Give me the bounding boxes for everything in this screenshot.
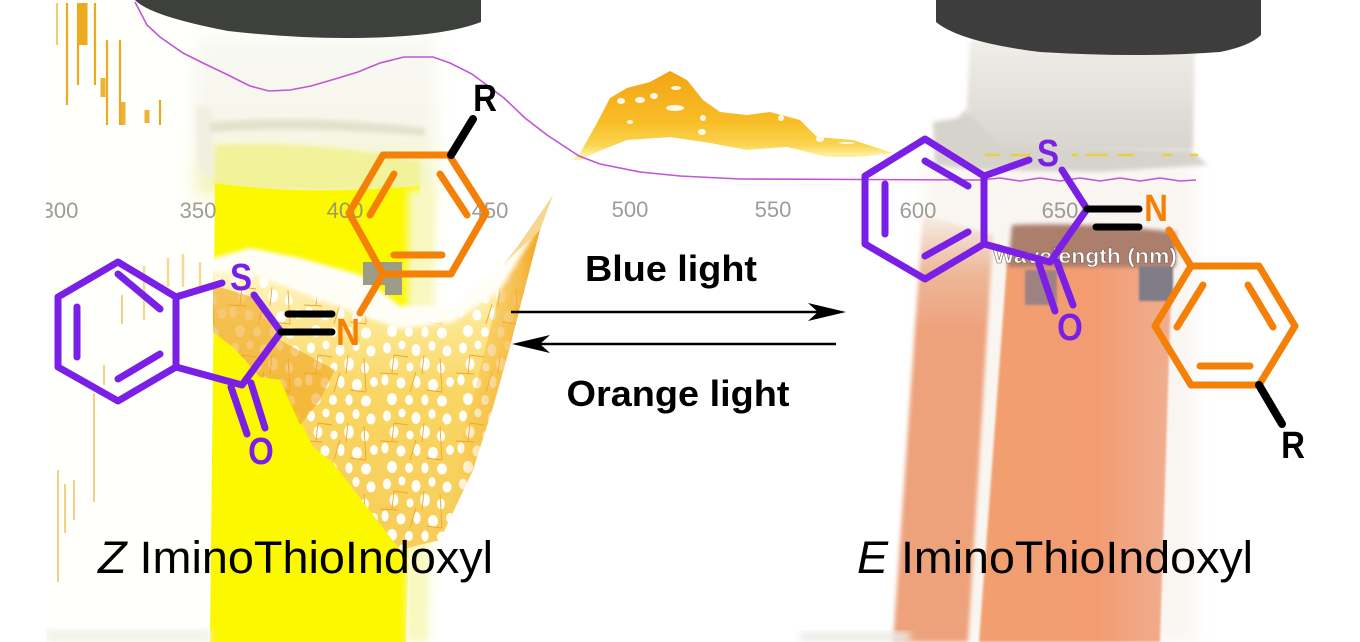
- black R bond: [1259, 385, 1282, 424]
- right vial: yellow trace fragments on the silver band: [985, 154, 1198, 156]
- photo: right vial with orange solution: [800, 0, 1261, 642]
- atom labels: O: [248, 431, 274, 473]
- spectrum: increasing band peak: [572, 71, 893, 160]
- molecule: Z isomer: [58, 78, 497, 473]
- spectrum: noisy traces at the far left: [57, 3, 200, 582]
- arrow: reverse, orange light: [512, 335, 836, 353]
- wavelength axis labels: 600: [900, 198, 936, 223]
- cap: [135, 0, 481, 38]
- molecule: E isomer: [865, 133, 1305, 467]
- label: blue light: Blue light: [585, 248, 757, 289]
- wavelength axis labels: 550: [755, 197, 791, 222]
- atom labels: R: [473, 78, 497, 120]
- purple thioindoxyl core: [865, 139, 1087, 311]
- black imine double bond: [1087, 209, 1139, 227]
- orange aryl ring: [1155, 230, 1295, 385]
- caption: Z isomer: Z IminoThioIndoxyl: [97, 532, 493, 583]
- atom labels: [230, 78, 497, 473]
- wavelength axis title: Wavelength (nm): [993, 246, 1177, 268]
- wavelength axis labels: 350: [180, 198, 216, 223]
- wavelength axis labels: 500: [612, 197, 648, 222]
- black R bond: [451, 119, 473, 155]
- purple thioindoxyl core: [58, 262, 281, 434]
- atom labels: [1037, 133, 1305, 467]
- atom labels: N: [1144, 188, 1168, 230]
- spectrum: decreasing band, lattice of traces: [213, 195, 553, 550]
- wavelength axis labels: 450: [472, 198, 508, 223]
- wavelength axis labels: 650: [1042, 198, 1078, 223]
- clipped left edge of the spectrum: [0, 0, 46, 642]
- wavelength axis labels: 300: [42, 198, 78, 223]
- arrow: forward, blue light: [511, 303, 846, 321]
- atom labels: S: [230, 257, 252, 299]
- spectrum: single purple trace: [135, 2, 1196, 181]
- orange aryl ring: [349, 155, 486, 313]
- wavelength axis labels: [42, 197, 1078, 223]
- atom labels: R: [1281, 425, 1305, 467]
- cap: [936, 0, 1261, 55]
- atom labels: O: [1057, 307, 1083, 349]
- label: orange light: Orange light: [566, 373, 790, 414]
- photo: left vial with yellow solution: [46, 0, 481, 642]
- wavelength axis labels: 400: [327, 198, 363, 223]
- atom labels: N: [336, 312, 360, 354]
- caption: E isomer: E IminoThioIndoxyl: [857, 532, 1253, 583]
- atom labels: S: [1037, 133, 1059, 175]
- black imine double bond: [281, 314, 332, 332]
